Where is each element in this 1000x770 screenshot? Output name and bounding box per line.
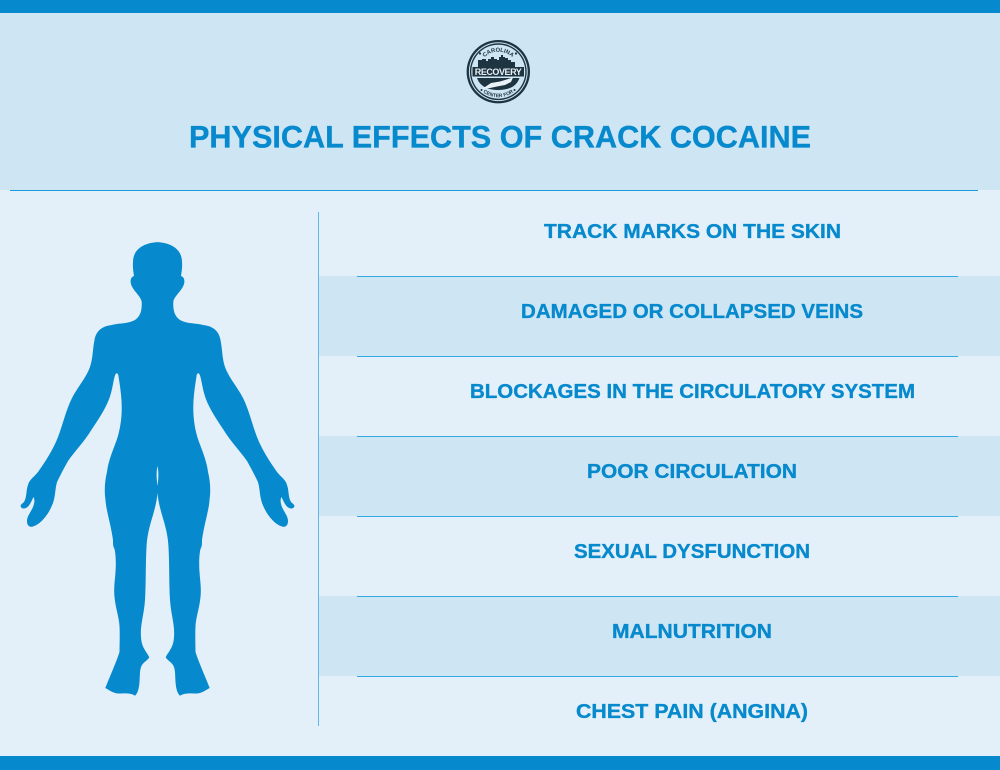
effect: blockages: BLOCKAGES IN THE CIRCULATORY SYSTEM [470,381,915,403]
icon: Carolina Recovery Center logo: CENTER FOR [484,90,514,98]
recovery band [472,67,524,76]
effect: malnutrition: MALNUTRITION [612,621,772,643]
effect: damaged veins: DAMAGED OR COLLAPSED VEINS [521,301,863,323]
effect: sexual dysfunction: SEXUAL DYSFUNCTION [574,541,810,563]
title: PHYSICAL EFFECTS OF CRACK COCAINE [189,118,811,154]
icon: human body silhouette [21,242,294,696]
effect: poor circulation: POOR CIRCULATION [587,461,797,483]
top bar [0,0,1000,13]
panel: effects list [319,221,1000,723]
bottom bar [0,756,1000,770]
panel: header [0,0,1000,191]
icon: Carolina Recovery Center logo [466,40,530,104]
skyline [478,55,515,67]
effect: chest pain: CHEST PAIN (ANGINA) [576,701,808,723]
icon: Carolina Recovery Center logo: CAROLINA [482,48,514,58]
icon: Carolina Recovery Center logo: RECOVERY [475,67,522,77]
state shape [477,78,520,90]
effect: track marks: TRACK MARKS ON THE SKIN [544,221,841,243]
